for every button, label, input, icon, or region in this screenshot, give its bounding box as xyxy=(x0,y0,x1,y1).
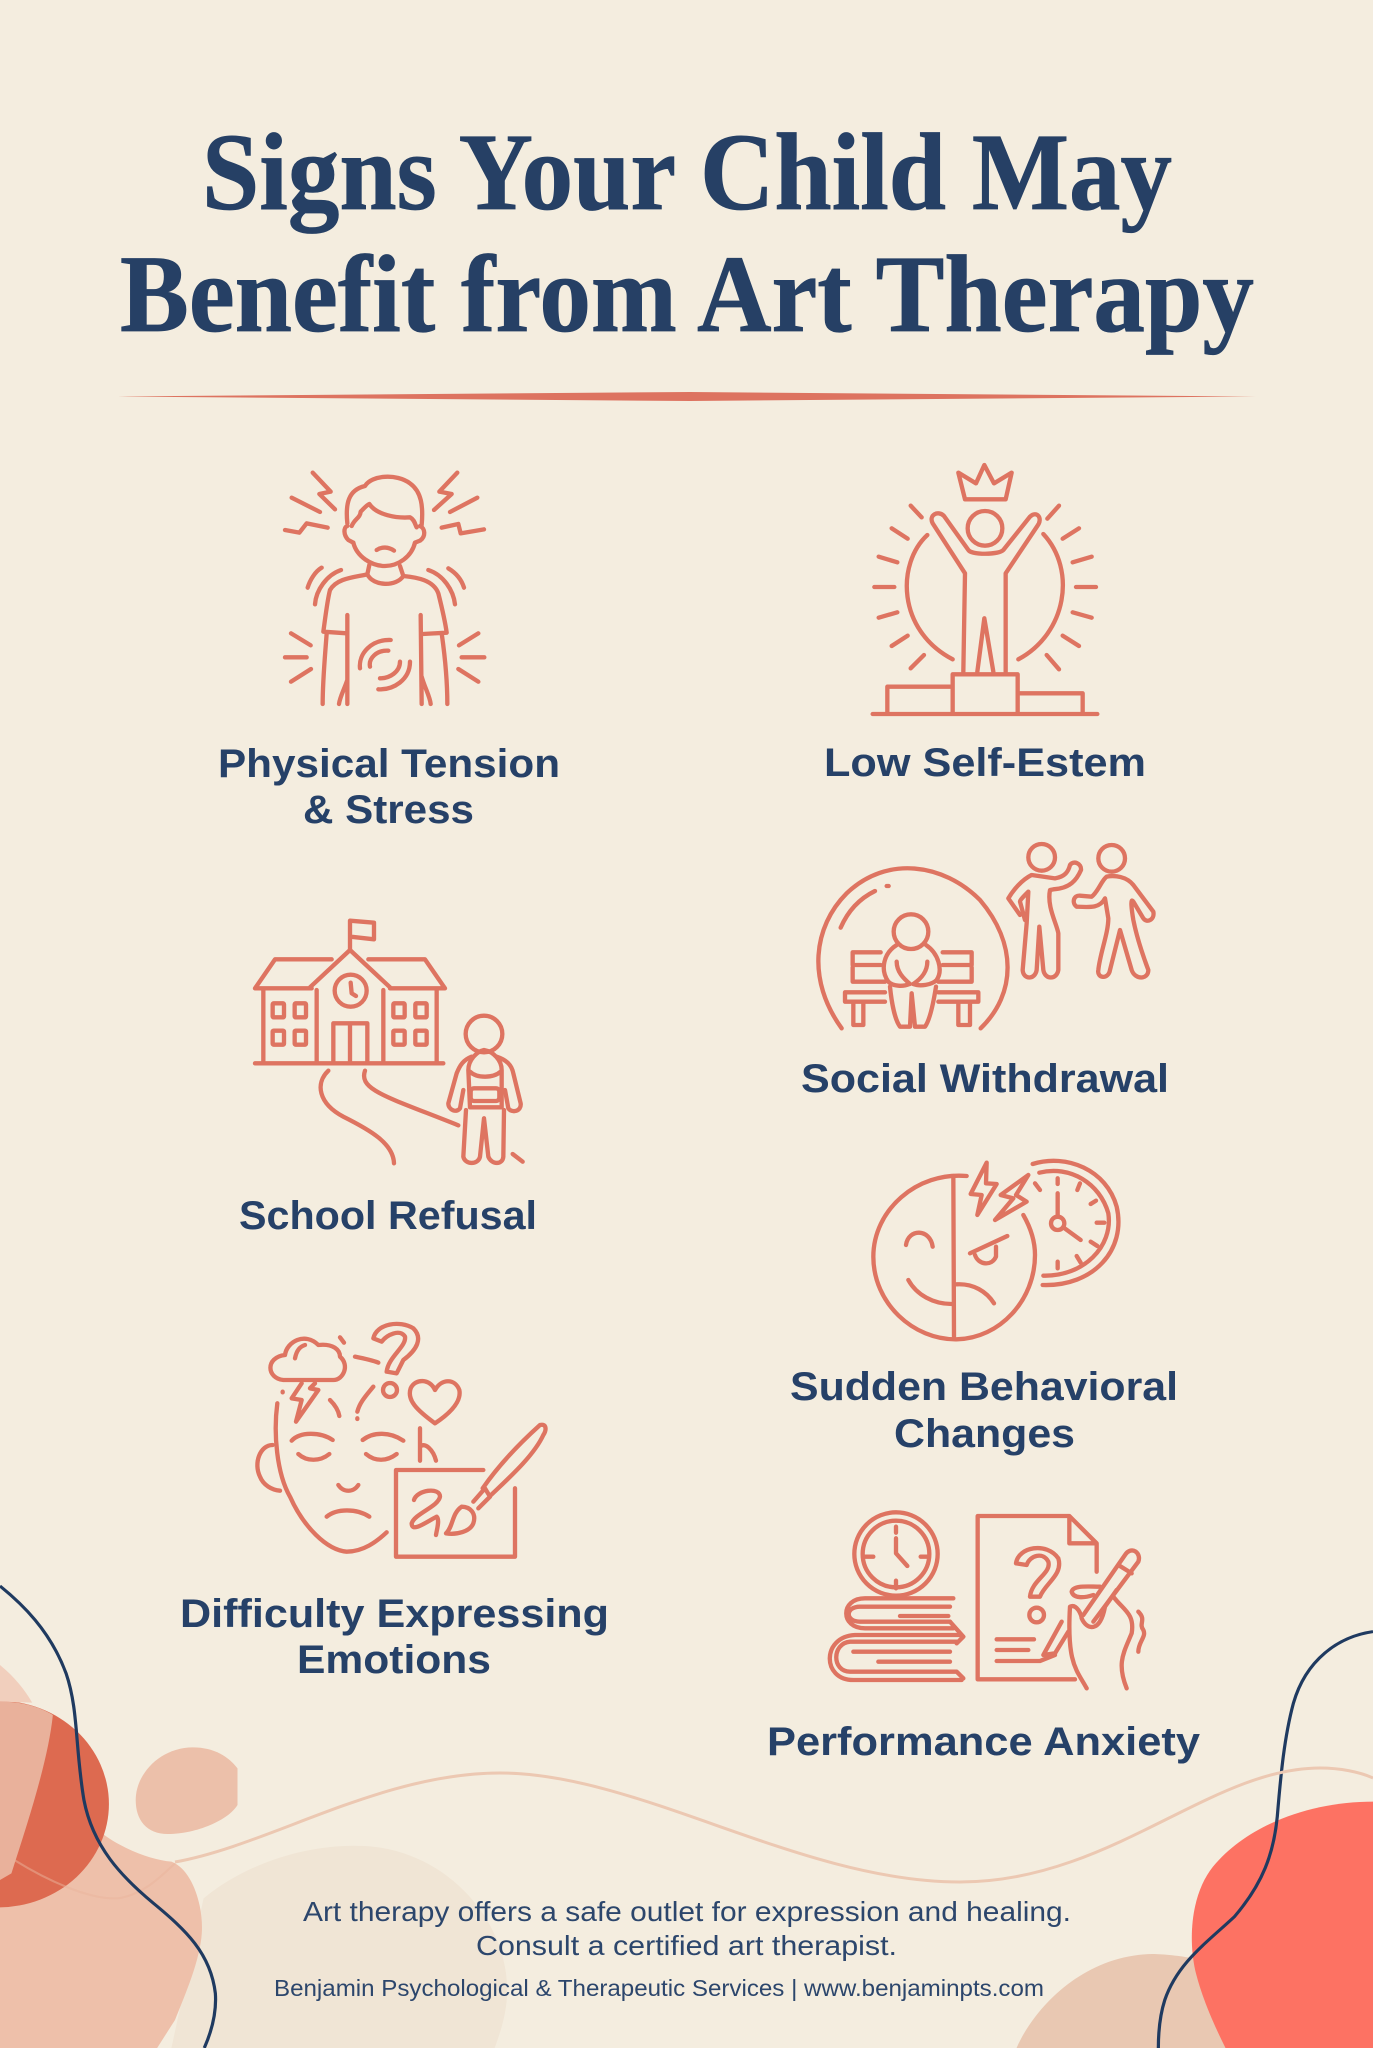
icon: face with thoughts and paintbrush xyxy=(257,1324,546,1557)
title xyxy=(120,111,1254,355)
icon: child on bench apart from peers xyxy=(818,844,1154,1028)
decorative shapes: bottom left xyxy=(0,1586,507,2048)
footer credit: Benjamin Psychological & Therapeutic Services | www.benjaminpts.com xyxy=(274,1975,1044,2001)
label: sudden behavioral changes: Changes xyxy=(894,1412,1075,1456)
decorative shapes: bottom right xyxy=(1017,1632,1373,2048)
label: sudden behavioral changes xyxy=(790,1365,1178,1456)
icon: school and student xyxy=(255,921,523,1163)
title: Benefit from Art Therapy xyxy=(120,233,1254,355)
label: difficulty expressing emotions xyxy=(180,1592,609,1682)
label: physical tension and stress: Physical Tension xyxy=(218,742,560,786)
label: physical tension and stress xyxy=(218,742,560,832)
title: Signs Your Child May xyxy=(202,111,1172,233)
panel: performance anxiety xyxy=(767,1512,1201,1764)
panel: low self-esteem xyxy=(824,465,1146,785)
label: physical tension and stress: & Stress xyxy=(303,788,474,832)
label: social withdrawal: Social Withdrawal xyxy=(801,1057,1169,1101)
label: school refusal: School Refusal xyxy=(239,1194,537,1238)
panel: school refusal xyxy=(239,921,537,1238)
footer message: Art therapy offers a safe outlet for expression and healing. xyxy=(303,1896,1071,1927)
label: sudden behavioral changes: Sudden Behavioral xyxy=(790,1365,1178,1409)
icon: child on podium xyxy=(873,465,1097,714)
label: difficulty expressing emotions: Difficulty Expressing xyxy=(180,1592,609,1636)
panel: sudden behavioral changes xyxy=(790,1161,1178,1456)
label: difficulty expressing emotions: Emotions xyxy=(297,1638,491,1682)
footer message xyxy=(303,1896,1071,1961)
decorative wave line xyxy=(175,1768,1373,1882)
panel: difficulty expressing emotions xyxy=(180,1324,609,1682)
footer message: Consult a certified art therapist. xyxy=(476,1930,897,1961)
icon: split face and clock xyxy=(873,1161,1118,1339)
panel: social withdrawal xyxy=(801,844,1169,1101)
label: performance anxiety: Performance Anxiety xyxy=(767,1720,1201,1764)
icon: clock, books and test paper xyxy=(830,1512,1144,1688)
label: low self-esteem: Low Self-Estem xyxy=(824,741,1146,785)
icon: tense child xyxy=(285,473,484,704)
panel: physical tension and stress xyxy=(218,473,560,832)
title divider xyxy=(118,392,1256,401)
